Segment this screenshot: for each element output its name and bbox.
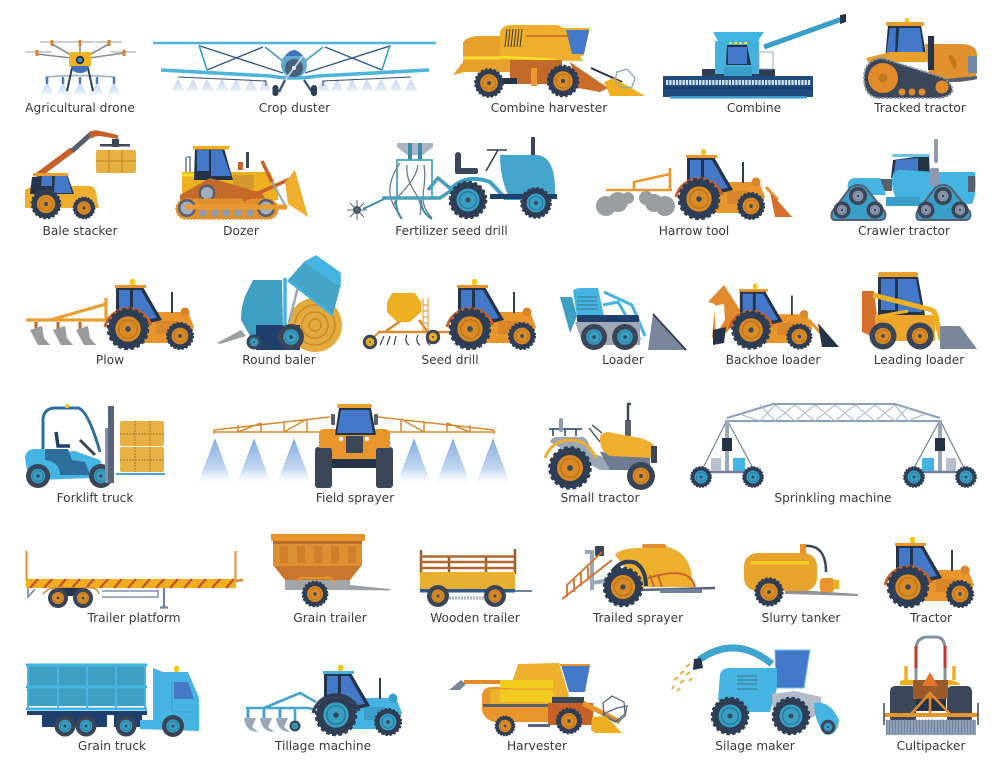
label: Wooden trailer [430, 611, 521, 625]
label: Sprinkling machine [774, 491, 892, 505]
vehicle: harrow tool [596, 149, 792, 238]
label: Slurry tanker [762, 611, 841, 625]
vehicle: dozer [176, 146, 308, 238]
icon: wooden trailer [420, 549, 532, 607]
vehicle: trailer platform [26, 551, 243, 625]
vehicle: tracked tractor [864, 18, 977, 115]
icon: forklift with bales [25, 404, 165, 488]
label: Harvester [507, 739, 568, 753]
vehicle: crop duster [153, 43, 436, 115]
vehicle: tillage machine [244, 665, 402, 753]
label: Agricultural drone [25, 101, 135, 115]
vehicle: combine [663, 14, 846, 115]
label: Crawler tractor [858, 224, 951, 238]
label: Cultipacker [897, 739, 966, 753]
icon: tractor with disc harrow [596, 149, 792, 219]
vehicle: grain truck [26, 664, 199, 753]
vehicle: fertilizer seed drill [347, 137, 557, 238]
label: Tractor [909, 611, 953, 625]
icon: small tractor [545, 404, 657, 490]
vehicle: slurry tanker [744, 544, 858, 625]
icon: skid steer loader [862, 272, 977, 350]
icon: bulldozer [176, 146, 308, 219]
vehicle: round baler [217, 256, 342, 367]
label: Dozer [223, 224, 260, 238]
icon: drone [25, 40, 136, 96]
label: Field sprayer [316, 491, 395, 505]
vehicle: loader [560, 288, 686, 367]
icon: side-view combine harvester [453, 25, 645, 97]
icon: trailed sprayer [562, 544, 715, 606]
label: Trailer platform [86, 611, 181, 625]
icon: irrigation truss [691, 404, 976, 487]
icon: tracked tractor [864, 18, 977, 98]
vehicle: backhoe loader [708, 284, 839, 367]
label: Trailed sprayer [592, 611, 684, 625]
icon: skid loader, blue [560, 288, 686, 350]
icon: tractor with plow [26, 279, 194, 349]
label: Forklift truck [57, 491, 134, 505]
label: Bale stacker [42, 224, 118, 238]
icon: grain truck [26, 664, 199, 737]
icon: orange tractor [885, 537, 974, 607]
label: Combine [727, 101, 781, 115]
vehicle: bale stacker [25, 130, 136, 238]
icon: hopper trailer [271, 534, 390, 606]
icon: round baler [217, 256, 342, 352]
vehicle: sprinkling machine [691, 404, 976, 505]
label: Leading loader [874, 353, 965, 367]
label: Fertilizer seed drill [395, 224, 508, 238]
vehicle: agricultural drone [25, 40, 136, 115]
label: Tillage machine [274, 739, 371, 753]
icon: four-track tractor [831, 139, 976, 220]
label: Loader [602, 353, 645, 367]
icon: forage harvester [672, 648, 839, 735]
label: Harrow tool [659, 224, 729, 238]
label: Seed drill [421, 353, 479, 367]
label: Round baler [242, 353, 317, 367]
vehicle: cultipacker [884, 637, 978, 753]
label: Tracked tractor [873, 101, 967, 115]
icon: harvester [449, 663, 627, 736]
icon: biplane [153, 43, 436, 96]
label: Grain truck [78, 739, 147, 753]
vehicle: forklift truck [25, 404, 165, 505]
icon: sprayer front view [198, 404, 510, 488]
vehicle: combine harvester [453, 25, 645, 115]
icon: rear-view tractor with cultipacker [884, 637, 978, 735]
label: Combine harvester [491, 101, 608, 115]
icon: flatbed trailer [26, 551, 243, 608]
icon: bale stacker [25, 130, 136, 219]
icon: backhoe loader [708, 284, 839, 349]
vehicle: field sprayer [198, 404, 510, 505]
vehicle: wooden trailer [420, 549, 532, 625]
vehicle: plow [26, 279, 194, 367]
vehicle: crawler tractor [831, 139, 976, 238]
label: Crop duster [259, 101, 331, 115]
vehicle: harvester [449, 663, 627, 753]
label: Backhoe loader [726, 353, 821, 367]
label: Plow [96, 353, 124, 367]
vehicle: leading loader [862, 272, 977, 367]
icon: seed drill with blue tractor [347, 137, 557, 220]
icon: front-view combine [663, 14, 846, 98]
vehicle: tractor [885, 537, 974, 625]
vehicle: trailed sprayer [562, 544, 715, 625]
icon: tractor with seed drill [363, 279, 536, 349]
icon: slurry tanker [744, 544, 858, 606]
label: Small tractor [561, 491, 640, 505]
vehicle: silage maker [672, 648, 839, 753]
vehicle: seed drill [363, 279, 536, 367]
icon: blue tractor with tiller [244, 665, 402, 735]
label: Silage maker [715, 739, 796, 753]
label: Grain trailer [293, 611, 368, 625]
vehicle: small tractor [545, 404, 657, 505]
vehicle: grain trailer [271, 534, 390, 625]
